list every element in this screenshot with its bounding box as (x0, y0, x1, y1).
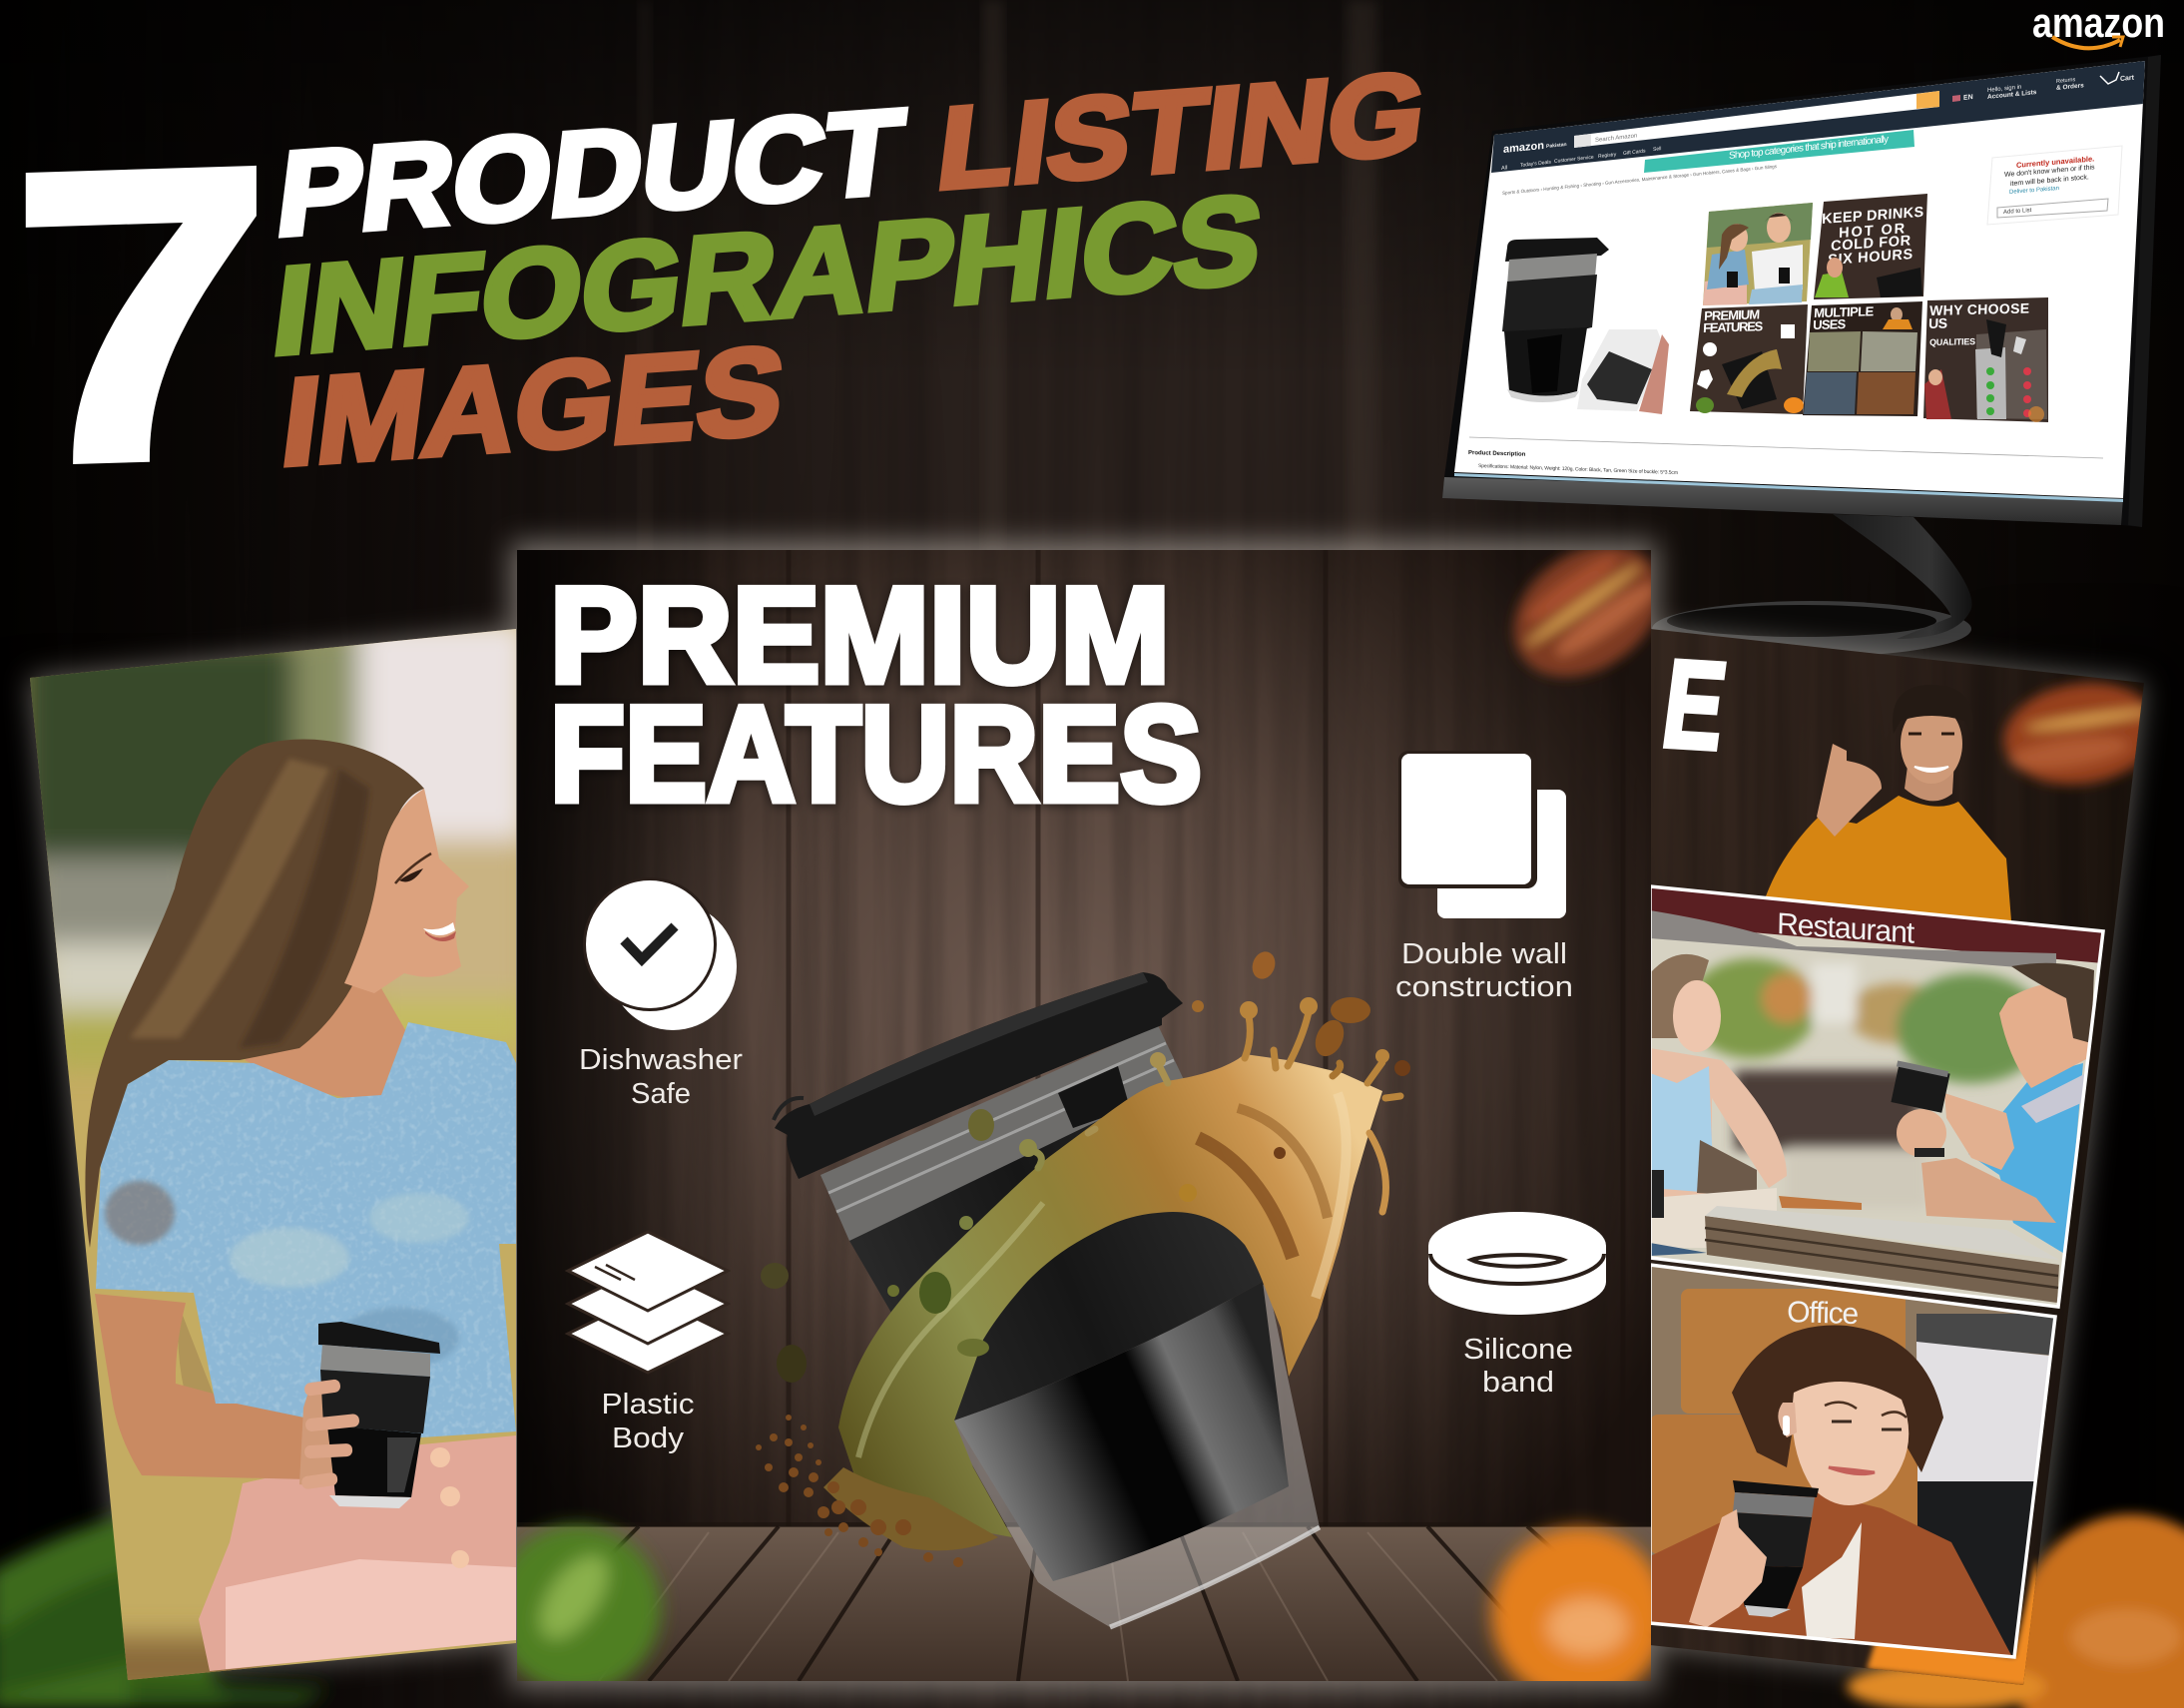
thumbnail: multiple uses: USES (1813, 316, 1847, 332)
arm (95, 1294, 309, 1479)
heading: PREMIUM FEATURES (550, 559, 1202, 830)
frame: office (1650, 1265, 2055, 1657)
thumbnail: why choose us: WHY CHOOSE (1929, 300, 2029, 318)
table top (517, 1522, 1651, 1681)
thumbnail: multiple uses (1803, 301, 1922, 416)
heading: PREMIUM FEATURES: FEATURES (550, 678, 1202, 830)
awning (1650, 886, 2103, 963)
label: Restaurant: Restaurant (1777, 907, 1915, 950)
restaurant woman (1650, 954, 1787, 1256)
thumbnail: couple (1703, 203, 1813, 305)
orange fruit peek at bottom right (1867, 1557, 2046, 1687)
label: Dishwasher Safe: Dishwasher (579, 1044, 743, 1076)
nut fruit blur (1997, 674, 2165, 794)
numeral 7: 7 (10, 80, 273, 551)
icon: double wall squares (1398, 751, 1566, 918)
thumbnail: keep drinks: KEEP DRINKS (1822, 205, 1924, 228)
amazon nav bar: amazon (1503, 140, 1544, 156)
product description (1468, 437, 2103, 476)
shirt (96, 1022, 516, 1438)
availability box: Add to List (2003, 208, 2032, 216)
office woman head (1732, 1326, 1943, 1505)
cup in hand (318, 1322, 440, 1508)
teal banner (1644, 130, 1914, 173)
thumbnail: keep drinks: COLD FOR (1831, 233, 1911, 255)
amazon nav bar: Gift Cards (1623, 148, 1646, 157)
office hand (1689, 1509, 1767, 1627)
teal banner: Shop top categories that ship internationally (1729, 134, 1889, 162)
thumbnail: premium features: PREMIUM (1704, 306, 1761, 323)
amazon nav bar: Customer Service (1554, 155, 1594, 165)
man thumbs-up (1766, 685, 2012, 933)
title (10, 47, 1432, 551)
availability box: Deliver to Pakistan (2009, 186, 2059, 196)
product description: Product Description (1468, 450, 1526, 458)
monitor stand (1652, 514, 1972, 657)
label: Silicone band: Silicone (1463, 1334, 1573, 1366)
amazon nav bar: Registry (1598, 152, 1617, 160)
label: Office: Office (1787, 1296, 1860, 1331)
availability box: We don't know when or if this (2004, 164, 2095, 179)
office jacket (1650, 1487, 2012, 1657)
hair lower (178, 1308, 215, 1398)
icon: silicone band (1428, 1212, 1606, 1315)
office chair (1650, 1289, 1917, 1554)
shirt lace details (105, 1181, 469, 1368)
thumbnail: premium features: FEATURES (1703, 318, 1764, 335)
label: Dishwasher Safe: Safe (631, 1078, 691, 1110)
label: Silicone band (1463, 1334, 1573, 1399)
thumbnail: multiple uses: MULTIPLE (1814, 303, 1875, 320)
amazon nav bar: Sell (1653, 146, 1661, 153)
availability box: Currently unavailable. (2016, 154, 2094, 170)
thumbnail: why choose us: QUALITIES (1929, 336, 1975, 347)
icon: dishwasher check (583, 877, 737, 1030)
amazon nav bar: Hello, sign in (1987, 85, 2021, 94)
thumbnail: keep drinks (1814, 194, 1927, 299)
monitor (1442, 55, 2161, 527)
panel: multiple uses right (1647, 629, 2165, 1687)
availability box: item will be back in stock. (2010, 174, 2089, 188)
panel: premium features center (493, 518, 1686, 1703)
frame: restaurant (1650, 886, 2103, 1307)
label: Double wall construction: Double wall (1401, 938, 1567, 970)
heading line 2: INFOGRAPHICS: INFOGRAPHICS (267, 168, 1270, 381)
silicone band (849, 1083, 1263, 1421)
main product photo (1502, 238, 1669, 414)
droplets (761, 948, 1410, 1383)
availability box (1987, 146, 2122, 225)
coffee grounds (756, 1415, 998, 1567)
amazon nav bar: EN (1963, 94, 1973, 102)
hand (299, 1380, 359, 1487)
photo background (30, 629, 516, 1680)
thumbnail: keep drinks: HOT OR (1839, 221, 1906, 242)
fruit: lime blur bottom left (0, 1512, 329, 1708)
fruit: orange blur (1491, 1527, 1667, 1703)
restaurant table (1705, 1196, 2059, 1303)
icon: plastic body layers (568, 1232, 728, 1373)
breadcrumb: Sports & Outdoors › Hunting & Fishing › Shooting › Gun Accessories, Maintenance & Storage › Gun Holsters, Cases & Bags › Gun Slings (1502, 164, 1778, 196)
scene: office (1647, 1258, 2066, 1667)
neck and chest (245, 978, 408, 1103)
amazon nav bar: & Orders (2056, 82, 2084, 92)
splash shading (858, 1093, 1347, 1457)
cup body (954, 1282, 1289, 1581)
label: Double wall construction (1395, 938, 1573, 1003)
restaurant man (1889, 963, 2094, 1255)
product description: Specifications: Material: Nylon, Weight: 120g, Color: Black, Tan, Green Size of buckle: 5*3.5cm (1478, 463, 1678, 476)
amazon nav bar (1491, 61, 2145, 173)
heading: PREMIUM FEATURES: PREMIUM (550, 559, 1170, 711)
thumbnail: why choose us: US (1928, 315, 1947, 331)
clear section (820, 1025, 1188, 1241)
scene: restaurant (1647, 878, 2116, 1318)
letter E of cropped heading: E (1656, 635, 1733, 776)
label: Plastic Body (601, 1389, 695, 1454)
office cup (1733, 1480, 1819, 1617)
hair (85, 740, 424, 1248)
screen (1454, 61, 2145, 498)
amazon nav bar: Account & Lists (1987, 89, 2037, 101)
label: Double wall construction: construction (1395, 971, 1573, 1003)
bezel (1442, 55, 2161, 527)
label: Silicone band: band (1482, 1367, 1554, 1399)
liquid splash ribbon (838, 1054, 1382, 1537)
label: Dishwasher Safe (579, 1044, 743, 1110)
amazon nav bar: Pakistan (1546, 142, 1567, 150)
heading line 3: IMAGES: IMAGES (275, 321, 792, 492)
amazon nav bar: Search Amazon (1595, 133, 1637, 144)
fingers (300, 1379, 360, 1489)
thumbnail: why choose us (1923, 297, 2048, 422)
cup with splash (756, 948, 1410, 1627)
amazon nav bar: Returns (2056, 77, 2075, 85)
heading line 1: PRODUCT: PRODUCT (271, 84, 909, 262)
amazon nav bar: All (1501, 165, 1507, 172)
lid (775, 972, 1183, 1179)
amazon nav bar: Cart (2120, 75, 2135, 83)
panel: lifestyle photo left (30, 629, 516, 1680)
face (344, 789, 469, 993)
fruit: nut blur (1488, 518, 1686, 704)
skirt (199, 1435, 516, 1671)
heading line 1: LISTING: LISTING (931, 47, 1432, 214)
label: Plastic Body: Body (612, 1423, 685, 1454)
thumbnail: premium features (1690, 304, 1808, 414)
label: Plastic Body: Plastic (601, 1389, 695, 1421)
eye and mouth (395, 854, 456, 941)
clear base (948, 1283, 1320, 1627)
splash crown arms (1028, 1012, 1400, 1212)
halo glow behind panels (30, 542, 2144, 1688)
amazon nav bar: Today's Deals (1520, 160, 1551, 169)
fruit: orange blur bottom right (1847, 1514, 2184, 1708)
thumbnail: keep drinks: SIX HOURS (1828, 247, 1913, 269)
fruit: lime blur (493, 1525, 661, 1693)
